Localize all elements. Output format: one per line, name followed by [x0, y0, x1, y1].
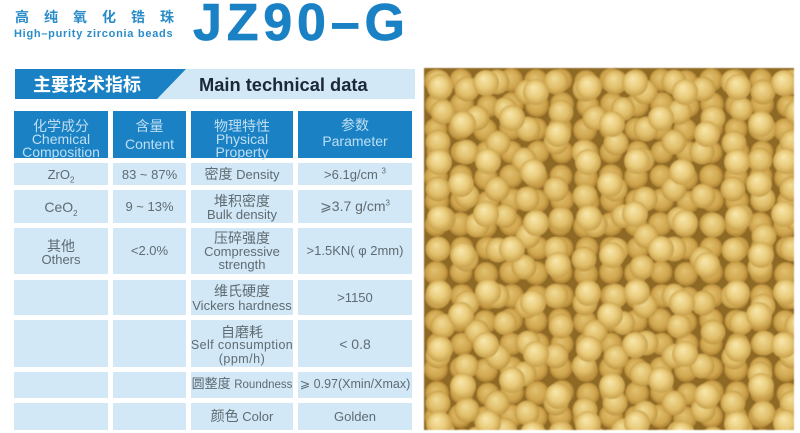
row: bulk density label: Bulk density — [207, 207, 277, 222]
row: density value — [298, 163, 412, 185]
row: self consumption value: < 0.8 — [339, 336, 371, 352]
header: physical property: Property — [216, 144, 268, 160]
row: compressive strength label: strength — [218, 257, 265, 272]
row: roundness empty composition — [14, 372, 108, 398]
row: self consumption empty composition — [14, 320, 108, 367]
title: Chinese product name: 高纯氧化锆珠 — [15, 9, 189, 25]
row: roundness value — [298, 372, 412, 398]
row: self consumption label: Self consumption — [191, 338, 293, 352]
beads: dark gaps background — [424, 68, 794, 430]
row: ZrO2 content — [113, 163, 186, 185]
row: CeO2 content: 9 ~ 13% — [125, 199, 174, 214]
row: vickers hardness value: >1150 — [337, 290, 373, 305]
header: chemical composition: 化学成分 — [33, 118, 89, 134]
photo: golden zirconia beads — [423, 67, 795, 431]
row: bulk density value: ⩾3.7 g/cm3 — [320, 198, 390, 214]
header: parameter: 参数 — [341, 116, 369, 132]
row: vickers empty content — [113, 280, 186, 315]
row: self consumption label: (ppm/h) — [219, 352, 265, 366]
row: others content — [113, 228, 186, 274]
header: content: 含量 — [136, 118, 164, 134]
row: bulk density label — [191, 190, 293, 223]
row: vickers hardness value — [298, 280, 412, 315]
header: content — [113, 111, 186, 158]
banner: blue slanted tab — [15, 69, 186, 99]
beads: front layer — [424, 68, 794, 430]
row: color label — [191, 403, 293, 430]
row: compressive strength label: Compressive — [204, 244, 280, 258]
row: roundness empty content — [113, 372, 186, 398]
row: CeO2 composition: CeO2 — [44, 199, 78, 218]
row: density label: 密度 Density — [205, 166, 279, 182]
row: compressive strength label: 压碎强度 — [214, 230, 270, 246]
row: bulk density value — [298, 190, 412, 223]
header: chemical composition: Chemical — [32, 131, 90, 147]
row: vickers hardness label: 维氏硬度 — [214, 283, 270, 299]
row: vickers hardness label: Vickers hardness — [192, 298, 292, 313]
row: vickers empty composition — [14, 280, 108, 315]
header: parameter — [298, 111, 412, 158]
row: compressive strength value: >1.5KN( φ 2mm) — [307, 243, 403, 258]
subtitle: English product name: High–purity zirconia beads — [14, 28, 173, 40]
row: others composition: 其他 — [47, 238, 75, 254]
header: physical property — [191, 111, 293, 158]
row: ZrO2 composition: ZrO2 — [48, 167, 74, 184]
banner heading: English: Main technical data — [199, 74, 368, 95]
section banner: main technical data — [15, 69, 415, 99]
beads: middle layer — [424, 68, 794, 430]
row: color empty composition — [14, 403, 108, 430]
row: others composition — [14, 228, 108, 274]
header: parameter: Parameter — [322, 132, 388, 148]
row: roundness label: 圆整度 Roundness — [192, 376, 292, 391]
row: self consumption label: 自磨耗 — [221, 324, 263, 340]
row: bulk density label: 堆积密度 — [214, 193, 270, 209]
row: color value — [298, 403, 412, 430]
header: physical property: 物理特性 — [214, 118, 270, 134]
row: compressive strength label — [191, 228, 293, 274]
table: technical data — [14, 111, 412, 430]
row: roundness value: ⩾ 0.97(Xmin/Xmax) — [300, 377, 410, 391]
row: self consumption empty content — [113, 320, 186, 367]
row: compressive strength value — [298, 228, 412, 274]
header: content: Content — [125, 136, 174, 152]
row: others content: <2.0% — [131, 243, 168, 258]
row: density value: >6.1g/cm 3 — [324, 166, 386, 182]
row: ZrO2 content: 83 ~ 87% — [122, 167, 177, 182]
row: color value: Golden — [334, 409, 376, 424]
header: chemical composition: Composition — [22, 144, 100, 160]
row: ZrO2 composition — [14, 163, 108, 185]
header: physical property: Physical — [216, 131, 268, 147]
row: CeO2 content — [113, 190, 186, 223]
row: color empty content — [113, 403, 186, 430]
row: self consumption value — [298, 320, 412, 367]
row: self consumption label — [191, 320, 293, 367]
beads: back layer — [424, 68, 794, 430]
row: vickers hardness label — [191, 280, 293, 315]
header: chemical composition — [14, 111, 108, 158]
row: color label: 颜色 Color — [211, 408, 273, 424]
banner heading: Chinese: 主要技术指标 — [33, 75, 141, 95]
row: CeO2 composition — [14, 190, 108, 223]
row: roundness label — [191, 372, 293, 398]
row: others composition: Others — [41, 252, 80, 267]
row: density label — [191, 163, 293, 185]
